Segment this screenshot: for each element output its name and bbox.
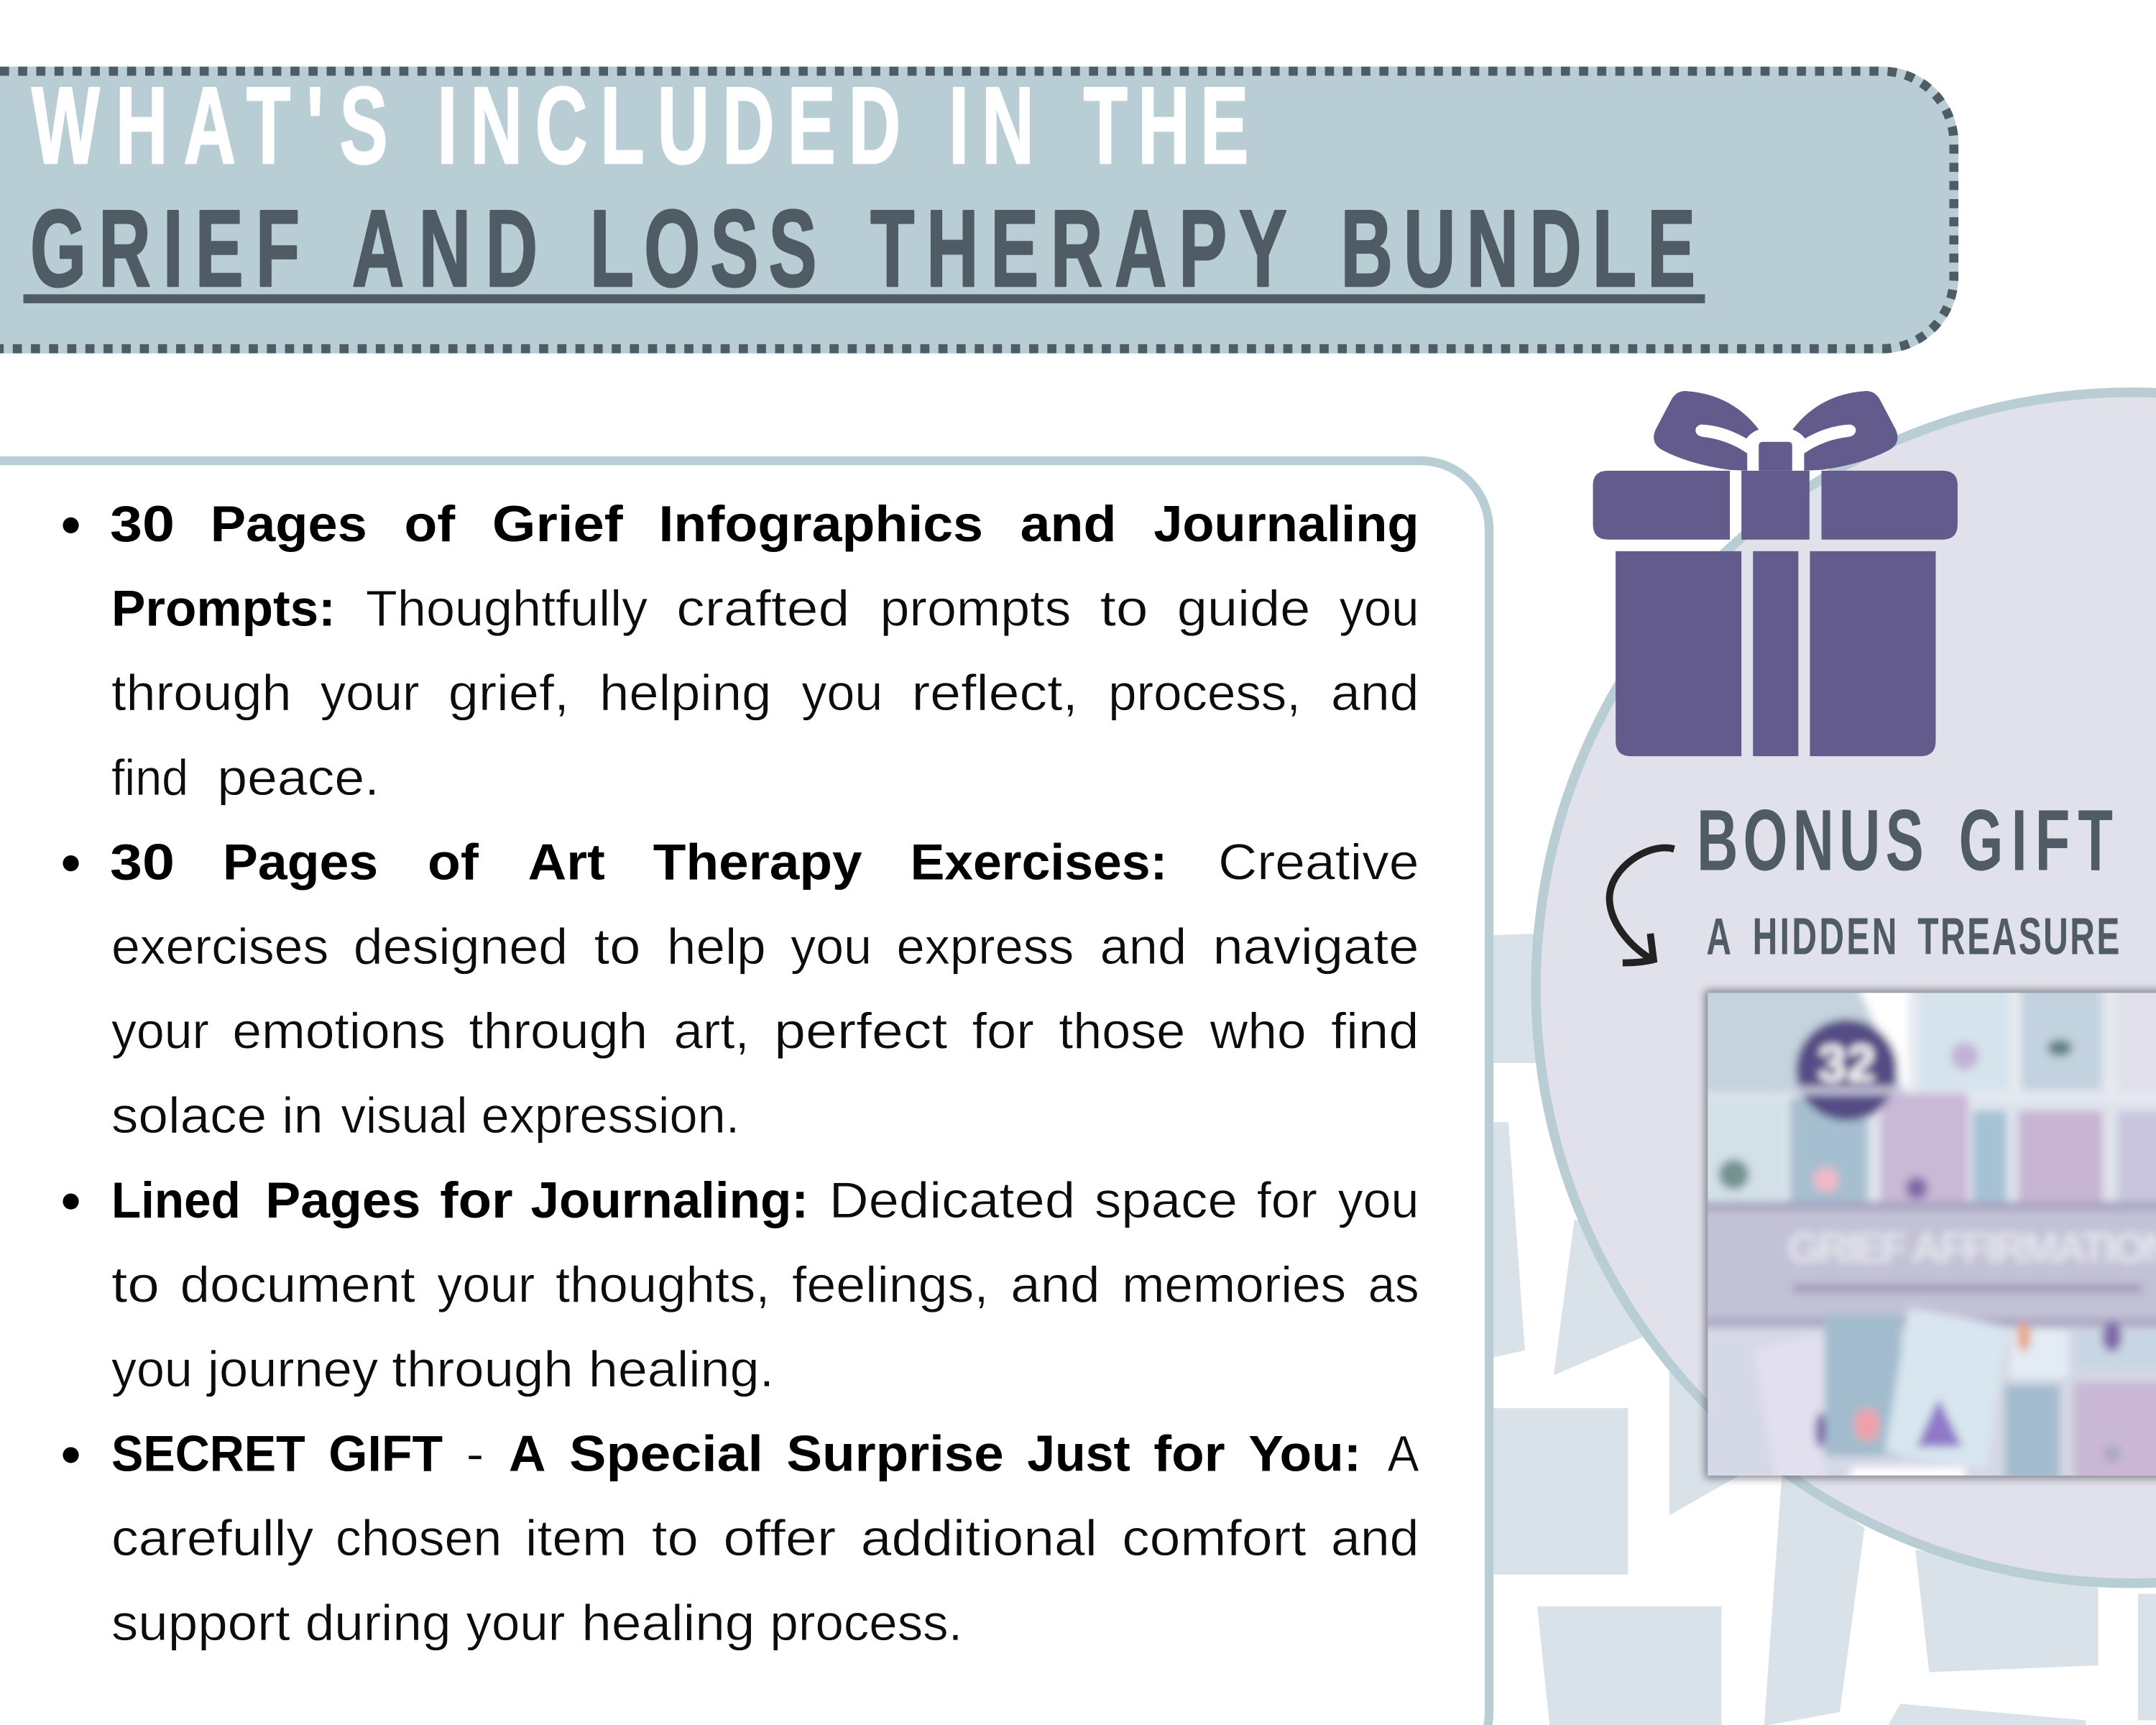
bullet: art therapy exercises: Art [528, 834, 605, 891]
bullet: grief infographics: peace. [217, 750, 379, 806]
title line 2: LOSS [590, 188, 816, 310]
bullet: lined pages: as [1368, 1256, 1419, 1313]
bullet: grief infographics: process, [1108, 665, 1301, 722]
bullet: secret gift: Just [1027, 1426, 1130, 1483]
title line 1: WHAT'S [32, 65, 388, 187]
bullet: art therapy exercises: exercises [111, 919, 328, 975]
bullet: grief infographics: crafted [676, 581, 849, 638]
bullet: art therapy exercises: and [1100, 919, 1187, 975]
bullet: secret gift: for [1153, 1426, 1225, 1483]
bullet: art therapy exercises: Exercises: [911, 834, 1167, 891]
bullet: secret gift: - [466, 1426, 484, 1483]
bullet: art therapy exercises: Pages [223, 834, 378, 891]
bullet: lined pages: feelings, [792, 1256, 989, 1313]
bullet: lined pages: space [1095, 1172, 1238, 1229]
bullet: art therapy exercises: art, [674, 1003, 750, 1060]
bullet: secret gift: offer [723, 1510, 836, 1567]
bullet: grief infographics: of [405, 496, 456, 553]
bullet: grief infographics: your [321, 665, 420, 722]
background patchwork shapes [1493, 931, 2156, 1725]
panel: bundle contents list [0, 461, 1489, 1725]
bullet: art therapy exercises: you [791, 919, 872, 975]
bullet: art therapy exercises: your [111, 1003, 209, 1060]
title line 2: THERAPY [870, 188, 1287, 310]
bullet: lined pages: Journaling: [531, 1172, 808, 1229]
bullet: art therapy exercises: designed [354, 919, 568, 975]
bullet: grief infographics: and [1331, 665, 1419, 722]
bullet: secret gift: chosen [336, 1510, 502, 1567]
bullet: lined pages: through [392, 1341, 573, 1398]
bullet: art therapy exercises [63, 834, 1419, 1144]
icon: curved arrow [1609, 848, 1674, 963]
bullet: lined pages: your [437, 1256, 535, 1313]
bullet: secret gift: carefully [111, 1510, 314, 1567]
bullet: secret gift: and [1331, 1510, 1419, 1567]
bullet: grief infographics: Journaling [1153, 496, 1419, 553]
bullet: lined pages: Pages [265, 1172, 420, 1229]
bullet: grief infographics: Grief [492, 496, 623, 553]
bullet: lined pages: for [1257, 1172, 1317, 1229]
bullet: grief infographics: you [1340, 581, 1419, 638]
bullet: secret gift: Special [569, 1426, 763, 1483]
bullet: art therapy exercises: visual [341, 1087, 468, 1144]
bullet: grief infographics: to [1100, 581, 1148, 638]
bullet: secret gift: support [111, 1595, 290, 1652]
title line 1 [32, 65, 1248, 187]
bullet: lined pages: document [180, 1256, 415, 1313]
title line 2: GRIEF [30, 188, 300, 310]
title line 1: THE [1084, 65, 1248, 187]
bullet: lined pages: and [1010, 1256, 1100, 1313]
bullet: lined pages: thoughts, [556, 1256, 770, 1313]
bullet: lined pages: Lined [111, 1172, 241, 1229]
title banner [0, 65, 1958, 354]
bullet: grief infographics: through [111, 665, 292, 722]
bullet: secret gift: your [466, 1595, 565, 1652]
bullet: grief infographics [63, 496, 1419, 806]
bullet: secret gift: to [652, 1510, 699, 1567]
bullet: lined pages: you [1338, 1172, 1419, 1229]
bonus circle [1536, 392, 2156, 1583]
bullet: art therapy exercises: expression. [482, 1087, 740, 1144]
bullet: art therapy exercises: Creative [1218, 834, 1419, 891]
bullet: art therapy exercises: those [1059, 1003, 1185, 1060]
bullet: art therapy exercises: through [469, 1003, 648, 1060]
bullet: lined pages: memories [1122, 1256, 1346, 1313]
bullet: grief infographics: reflect, [911, 665, 1078, 722]
bullet: secret gift: Surprise [786, 1426, 1004, 1483]
bullet: art therapy exercises: perfect [774, 1003, 948, 1060]
bullet: grief infographics: Prompts: [111, 581, 336, 638]
title line 2: BUNDLE [1340, 188, 1695, 310]
heading: bonus gift: GIFT [1959, 792, 2113, 888]
bullet: grief infographics: helping [599, 665, 771, 722]
bullet: art therapy exercises: navigate [1212, 919, 1419, 975]
subheading: a hidden treasure: HIDDEN [1753, 908, 1897, 966]
bullet: art therapy exercises: who [1210, 1003, 1307, 1060]
bullet: secret gift: comfort [1122, 1510, 1307, 1567]
bullet: grief infographics: you [801, 665, 883, 722]
bullet: secret gift: You: [1248, 1426, 1361, 1483]
bullet: art therapy exercises: Therapy [653, 834, 862, 891]
blurred product preview image [1691, 976, 2156, 1485]
bullet: secret gift: A [1387, 1426, 1419, 1483]
icon: gift box [1593, 391, 1958, 756]
bullet: art therapy exercises: help [667, 919, 766, 975]
bullet: grief infographics: Pages [211, 496, 367, 553]
bullet: art therapy exercises: of [428, 834, 479, 891]
title line 2 [30, 188, 1695, 310]
bullet: art therapy exercises: express [896, 919, 1074, 975]
bullet: secret gift: process. [770, 1595, 962, 1652]
bullet: secret gift: GIFT [328, 1426, 443, 1483]
bullet: secret gift: A [509, 1426, 546, 1483]
title line 1: INCLUDED [437, 65, 900, 187]
bullet: secret gift: item [525, 1510, 627, 1567]
bullet: art therapy exercises: emotions [232, 1003, 446, 1060]
bullet: lined pages: healing. [589, 1341, 774, 1398]
bullet: grief infographics: Thoughtfully [366, 581, 648, 638]
bullet: grief infographics: find [111, 750, 188, 806]
bullet: grief infographics: grief, [448, 665, 569, 722]
title line 1: IN [949, 65, 1034, 187]
subheading: a hidden treasure [1706, 908, 2119, 966]
bullet: art therapy exercises: find [1331, 1003, 1419, 1060]
bullet: secret gift: additional [861, 1510, 1097, 1567]
bullet: art therapy exercises: to [594, 919, 641, 975]
bullet: grief infographics: Infographics [658, 496, 983, 553]
heading: bonus gift: BONUS [1697, 792, 1924, 888]
bullet: art therapy exercises: 30 [110, 834, 175, 891]
bullet: lined pages: to [111, 1256, 160, 1313]
bullet: grief infographics: and [1021, 496, 1117, 553]
bullet: secret gift: during [305, 1595, 451, 1652]
subheading: a hidden treasure: TREASURE [1917, 908, 2119, 966]
bullet: lined pages: journey [206, 1341, 379, 1398]
bullet: art therapy exercises: in [282, 1087, 323, 1144]
bullet: lined pages: for [440, 1172, 513, 1229]
bullet: grief infographics: prompts [880, 581, 1071, 638]
bullet: lined pages: Dedicated [829, 1172, 1075, 1229]
title line 2: AND [352, 188, 538, 310]
bullet: secret gift: SECRET [111, 1426, 305, 1483]
bullet: grief infographics: guide [1177, 581, 1310, 638]
bullet: lined pages [63, 1172, 1419, 1398]
subheading: a hidden treasure: A [1706, 908, 1731, 966]
heading: bonus gift [1697, 792, 2113, 888]
bullet: secret gift [63, 1426, 1419, 1652]
blurred product preview image: 32 [1818, 1034, 1876, 1092]
bullet: art therapy exercises: for [972, 1003, 1034, 1060]
bullet: secret gift: healing [581, 1595, 755, 1652]
bullet: lined pages: you [111, 1341, 193, 1398]
bullet: art therapy exercises: solace [111, 1087, 267, 1144]
bullet: grief infographics: 30 [110, 496, 175, 553]
